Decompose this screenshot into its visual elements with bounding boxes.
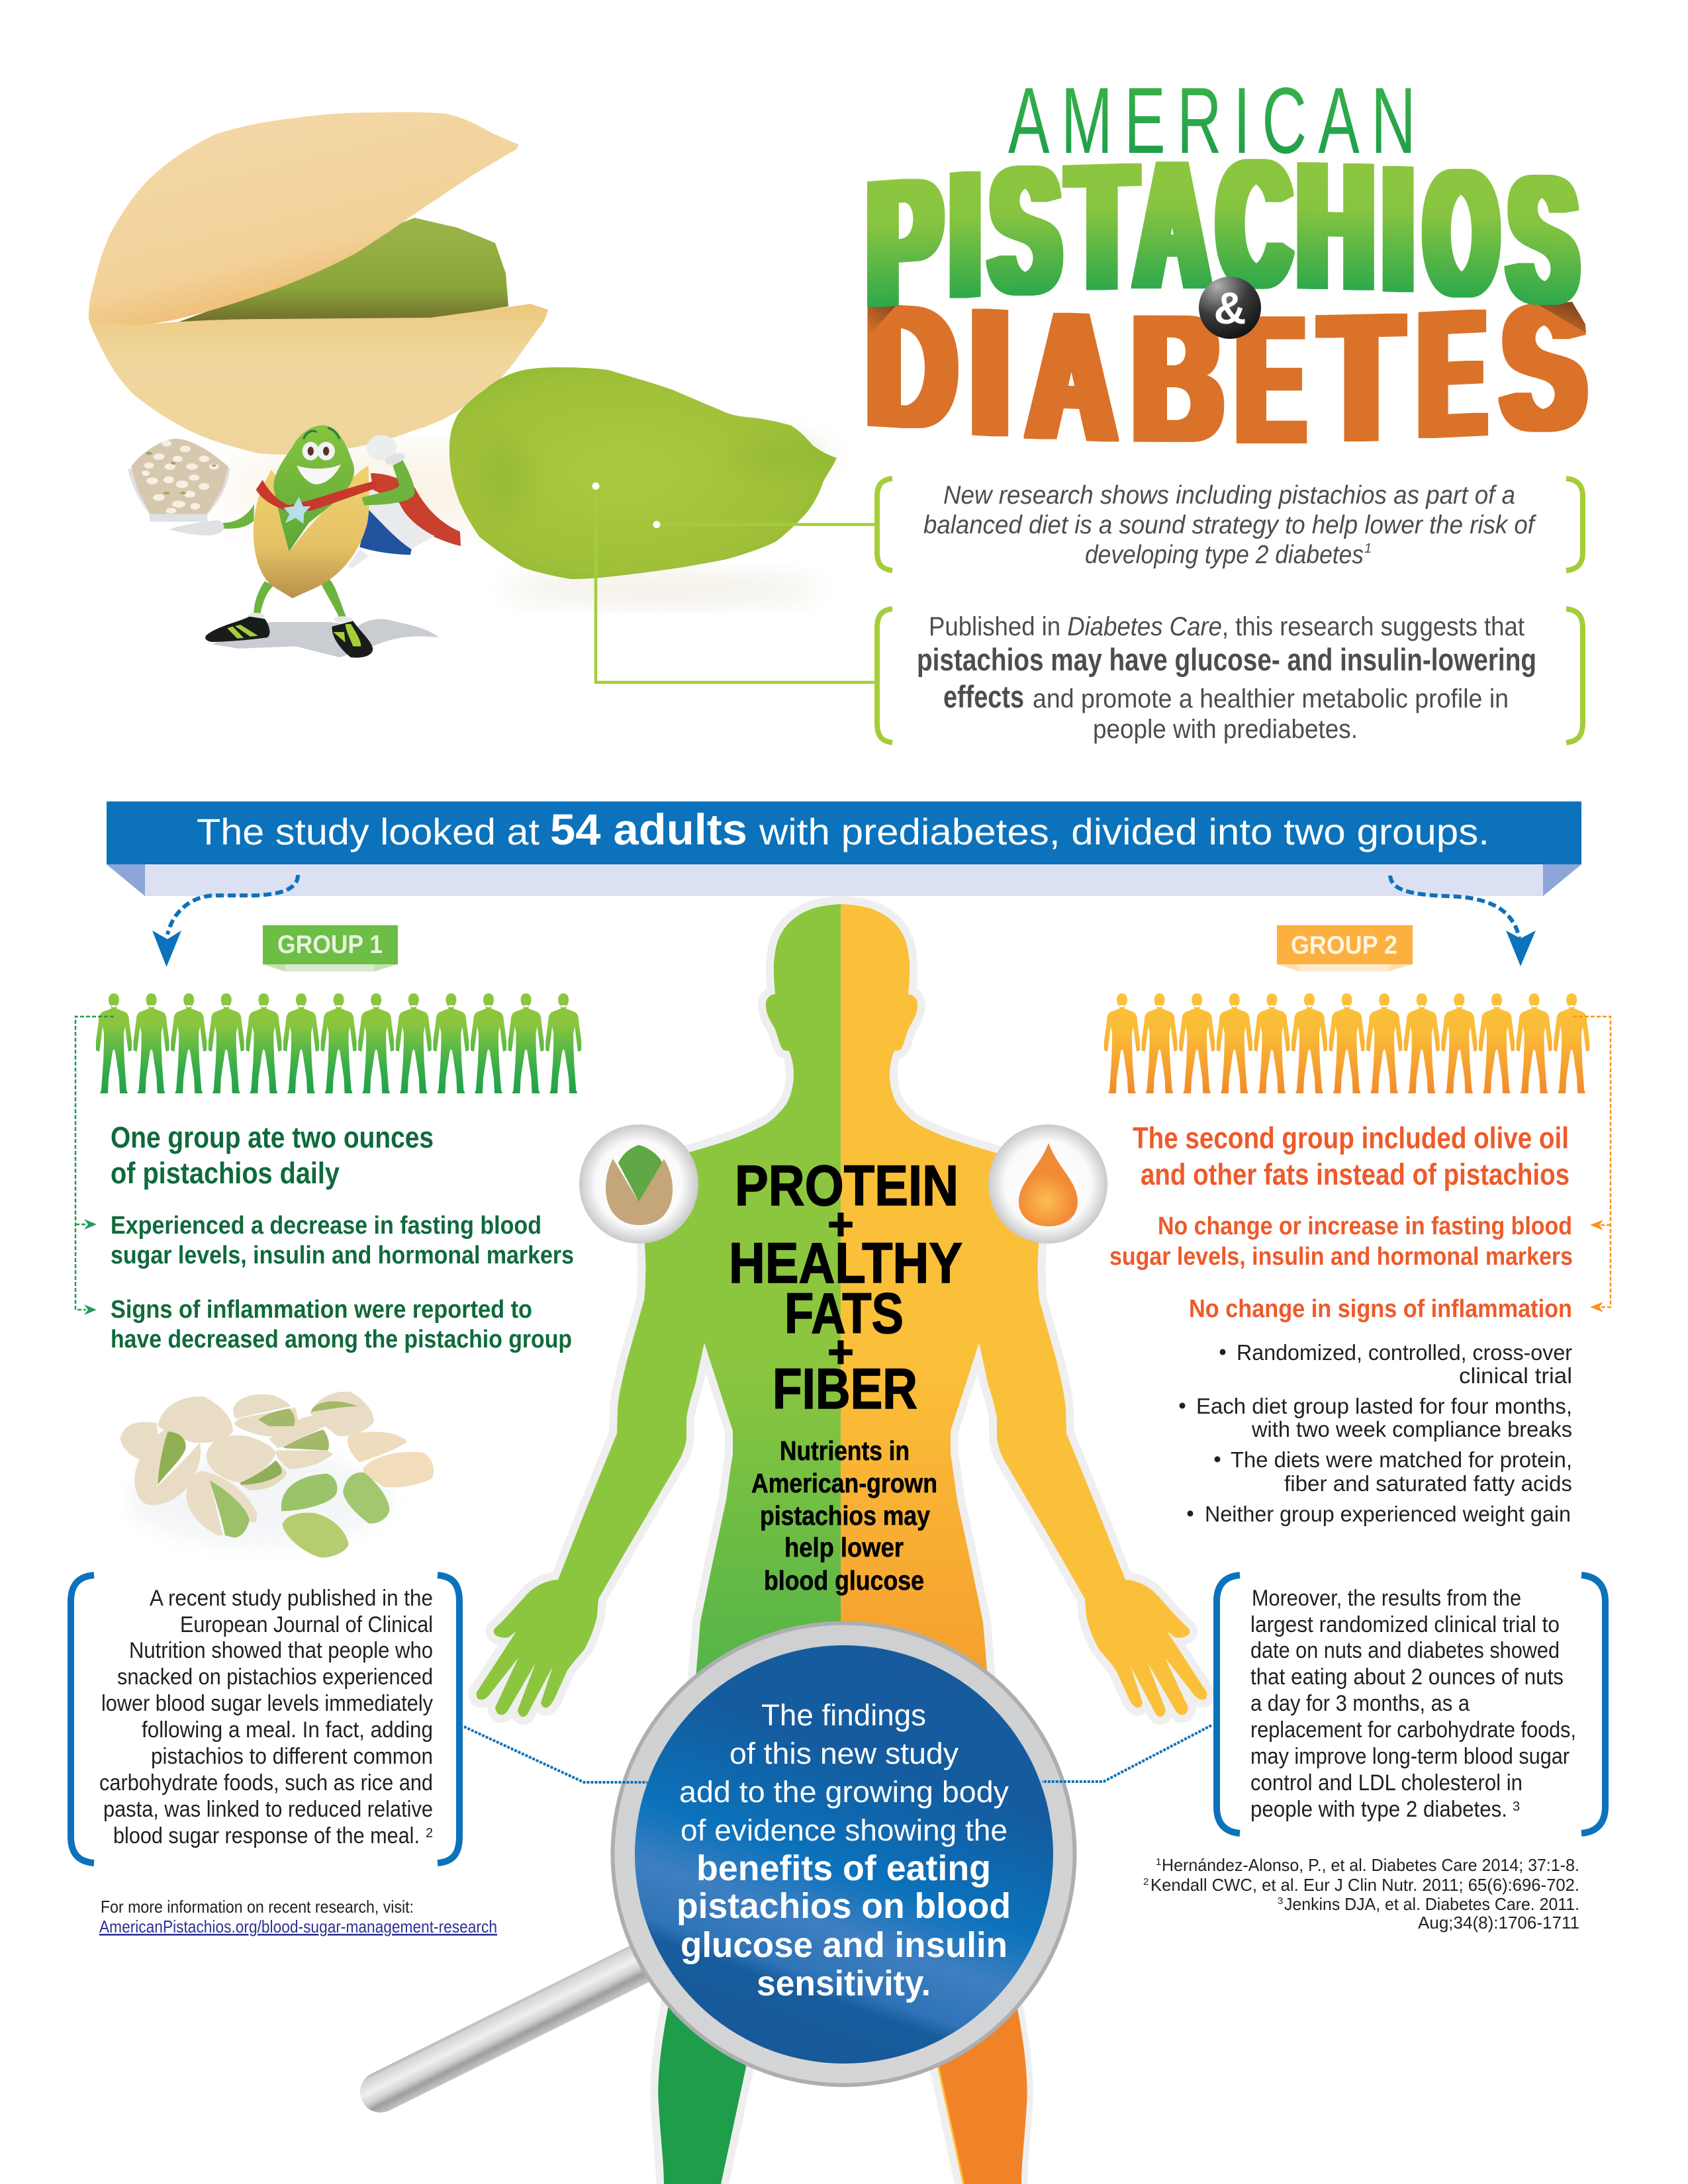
group 2 findings text [1109, 1121, 1573, 1323]
title line: Diabetes (arched orange letters) [867, 267, 1585, 481]
group 2 heading: The second group included olive oil [1133, 1121, 1569, 1155]
study design bullet list: • [1186, 1501, 1194, 1525]
references: 2 [1143, 1876, 1149, 1888]
title line: Diabetes (arched orange letters): E [1238, 280, 1303, 481]
banner text: with prediabetes, divided into two groups. [759, 811, 1489, 852]
study text lines: blood sugar response of the meal. [113, 1823, 420, 1848]
banner fold right [1543, 864, 1581, 896]
nutrient heading on body: PROTEIN [735, 1154, 959, 1218]
study design bullet list: Randomized, controlled, cross-over [1237, 1340, 1572, 1365]
references: Aug;34(8):1706-1711 [1418, 1913, 1579, 1933]
lens text: glucose and insulin [680, 1925, 1008, 1965]
orange half of body [836, 904, 1207, 2184]
large open nut left [134, 1428, 201, 1505]
title line: Pistachios (arched green letters): I [1383, 128, 1413, 329]
title line: Diabetes (arched orange letters): I [970, 270, 1009, 474]
trial text lines: replacement for carbohydrate foods, [1250, 1717, 1576, 1743]
group 1 result: blood sugar: sugar levels, insulin and hormonal markers [111, 1242, 574, 1269]
arrow: to group 2 [1390, 876, 1536, 966]
callout text: 1 [1364, 541, 1372, 556]
banner underside band [145, 864, 1543, 896]
group 1 heading: of pistachios daily [111, 1156, 340, 1190]
group 2 people row [1104, 993, 1589, 1093]
study design bullet list: Each diet group lasted for four months, [1196, 1394, 1572, 1418]
study text lines: Nutrition showed that people who [129, 1638, 433, 1663]
title line: Diabetes (arched orange letters): B [1133, 278, 1222, 480]
text block: nuts and diabetes trial [1217, 1575, 1605, 1833]
flexed arm and fist [362, 435, 414, 505]
group 1 heading: One group ate two ounces [111, 1120, 434, 1154]
dotted connector: right text to lens [1042, 1725, 1211, 1782]
title [867, 69, 1586, 481]
banner text: The study looked at [197, 811, 539, 852]
kernel shading [483, 437, 827, 516]
group 1 heading [111, 1120, 434, 1190]
callout text: effects [943, 679, 1024, 714]
title line: American: AMERICAN [1008, 69, 1416, 173]
red sash [256, 480, 379, 512]
nutrient subtext on body [751, 1435, 937, 1596]
mascot face [297, 428, 341, 484]
mascot shadow [212, 619, 439, 657]
green half of body [477, 904, 847, 2184]
group 2 label: GROUP 2 [1291, 931, 1397, 960]
mascot shell body [254, 465, 369, 598]
mascot: superhero pistachio character with bowl of nuts [128, 426, 461, 658]
left arm and gloved hand [169, 504, 254, 535]
trial text lines: Moreover, the results from the [1252, 1586, 1521, 1611]
title line: Diabetes (arched orange letters): D [867, 268, 956, 467]
title line: Pistachios (arched green letters): S [991, 128, 1059, 332]
group 2 heading [1133, 1121, 1570, 1191]
callout text: and promote a healthier metabolic profile in [1033, 684, 1509, 713]
study text lines: A recent study published in the [150, 1586, 433, 1611]
study text lines: 2 [426, 1826, 433, 1841]
trial text lines: that eating about 2 ounces of nuts [1250, 1664, 1564, 1690]
study text lines: pasta, was linked to reduced relative [103, 1797, 433, 1822]
lens text [677, 1698, 1011, 2003]
callout text: New research shows including pistachios as part of a [943, 481, 1515, 510]
study text lines: pistachios to different common [151, 1744, 433, 1769]
intro callout 2 [877, 609, 1583, 744]
green brackets [877, 609, 1583, 743]
group 1 result: inflammation: have decreased among the pistachio group [111, 1326, 572, 1353]
photo: pile of pistachios [120, 1392, 434, 1558]
study design bullet list: • [1213, 1447, 1221, 1471]
banner text [197, 805, 1489, 854]
title line: Diabetes (arched orange letters): E [1420, 272, 1484, 476]
references: 1 [1156, 1856, 1161, 1868]
group 2 result: blood sugar: sugar levels, insulin and hormonal markers [1109, 1243, 1573, 1271]
nutrient heading on body: FATS [784, 1282, 904, 1345]
human body figure [477, 904, 1207, 2184]
references: Kendall CWC, et al. Eur J Clin Nutr. 2011; 65(6):696-702. [1150, 1875, 1579, 1895]
callout text [917, 612, 1536, 744]
title line: Pistachios (arched green letters) [868, 124, 1577, 344]
more information link: For more information on recent research, visit: [101, 1897, 414, 1917]
trial text lines: a day for 3 months, as a [1250, 1691, 1470, 1716]
callout text: people with prediabetes. [1093, 715, 1358, 744]
callout text: balanced diet is a sound strategy to help lower the risk of [923, 511, 1537, 539]
banner fold left [107, 864, 145, 896]
lens text: benefits of eating [696, 1848, 991, 1888]
group 2 dashed connector arrows [1573, 1017, 1611, 1312]
group 2 heading: and other fats instead of pistachios [1141, 1158, 1570, 1191]
title line: Pistachios (arched green letters): I [951, 134, 980, 336]
nutrient subtext on body: blood glucose [764, 1565, 924, 1596]
nutrient heading on body [729, 1154, 962, 1421]
callout text [923, 481, 1537, 569]
lens text: add to the growing body [679, 1775, 1009, 1809]
title line: Diabetes (arched orange letters): A [1029, 273, 1114, 478]
study text lines: snacked on pistachios experienced [117, 1664, 433, 1690]
more information link: AmericanPistachios.org/blood-sugar-management-research [99, 1917, 497, 1936]
blue brackets [1217, 1575, 1605, 1833]
blue brackets [71, 1575, 459, 1863]
callout text: pistachios may have glucose- and insulin-lowering [917, 642, 1536, 677]
lens text: sensitivity. [757, 1964, 931, 2003]
trial text lines: may improve long-term blood sugar [1250, 1744, 1570, 1769]
references: Hernández-Alonso, P., et al. Diabetes Care 2014; 37:1-8. [1162, 1855, 1579, 1875]
legs [254, 576, 346, 619]
group 1 findings text [111, 1120, 574, 1353]
callout connector lines from kernel [592, 482, 874, 682]
callout text: developing type 2 diabetes [1085, 541, 1364, 569]
nutrient heading on body: FIBER [773, 1357, 917, 1421]
nutrient subtext on body: American-grown [751, 1468, 937, 1498]
references [1143, 1855, 1579, 1933]
title line: Pistachios (arched green letters): C [1219, 124, 1289, 324]
dotted connector: left text to lens [464, 1727, 647, 1782]
cape [348, 473, 461, 568]
study design bullet list: • [1178, 1393, 1186, 1418]
trial text lines: date on nuts and diabetes showed [1250, 1638, 1560, 1663]
callout text: Published in Diabetes Care, this research suggests that [929, 612, 1524, 641]
body halo outline [477, 904, 1207, 2184]
study text lines [99, 1586, 433, 1848]
magnifying glass [381, 1621, 1076, 2092]
group 1 label: GROUP 1 [277, 931, 383, 959]
title line: Pistachios (arched green letters): A [1137, 124, 1208, 326]
text block: European Journal study [71, 1575, 459, 1863]
banner bar [107, 801, 1581, 864]
group 1 result: blood sugar: Experienced a decrease in fasting blood [111, 1212, 541, 1240]
banner text: 54 adults [550, 805, 747, 854]
trial text lines [1250, 1586, 1576, 1822]
lens ring [610, 1621, 1076, 2087]
empty shells [348, 1432, 434, 1488]
study design bullet list: • [1219, 1340, 1227, 1364]
lower pistachio shell [89, 304, 548, 455]
study text lines: European Journal of Clinical [180, 1612, 433, 1637]
more information link [99, 1897, 497, 1936]
references: Jenkins DJA, et al. Diabetes Care. 2011. [1284, 1894, 1579, 1914]
lens text: pistachios on blood [677, 1886, 1011, 1926]
group 2 result: blood sugar: No change or increase in fasting blood [1158, 1212, 1572, 1240]
center nut [207, 1435, 287, 1490]
references: 3 [1278, 1895, 1283, 1907]
glass bowl of nuts [128, 439, 230, 522]
open nut bottom [187, 1471, 257, 1537]
upper pistachio shell [89, 112, 518, 325]
trial text lines: people with type 2 diabetes. [1250, 1797, 1507, 1822]
lens text: The findings [761, 1698, 926, 1732]
icon: pistachio badge [579, 1124, 698, 1244]
nutrient subtext on body: Nutrients in [780, 1435, 910, 1466]
title line: Pistachios (arched green letters): H [1298, 125, 1373, 328]
group 2 label [1277, 925, 1413, 972]
group 1 result: blood sugar [111, 1212, 574, 1269]
study design bullet list: clinical trial [1459, 1363, 1572, 1388]
study design bullet list: fiber and saturated fatty acids [1284, 1471, 1572, 1496]
study text lines: following a meal. In fact, adding [142, 1717, 433, 1743]
ribbon fold corners [868, 302, 1586, 334]
title line: Pistachios (arched green letters): P [868, 140, 941, 344]
study text lines: lower blood sugar levels immediately [101, 1691, 433, 1716]
ampersand badge: & [1213, 283, 1246, 334]
green brackets [877, 478, 1583, 570]
open pistachio kernel [172, 218, 508, 324]
group 1 result: inflammation [111, 1296, 572, 1353]
loose kernels [281, 1473, 389, 1558]
kernels in shells [258, 1401, 357, 1451]
trial text lines: control and LDL cholesterol in [1250, 1770, 1523, 1796]
title line: Pistachios (arched green letters): T [1069, 126, 1135, 328]
soft shadow under nuts [225, 457, 821, 604]
group 1 result: inflammation: Signs of inflammation were reported to [111, 1296, 532, 1324]
study design bullet list: Neither group experienced weight gain [1205, 1502, 1571, 1526]
group 2 result: inflammation: No change in signs of inflammation [1189, 1295, 1572, 1323]
whole green pistachio kernel [449, 367, 837, 579]
ampersand badge [1199, 277, 1261, 339]
study text lines: carbohydrate foods, such as rice and [99, 1770, 433, 1796]
pistachio photo group [89, 112, 837, 604]
intro callout 1 [877, 478, 1583, 570]
study design bullet list [1178, 1340, 1572, 1526]
shoes [205, 613, 373, 658]
lens glass [635, 1645, 1053, 2064]
study design bullet list: The diets were matched for protein, [1231, 1447, 1572, 1472]
lens text: of this new study [729, 1737, 959, 1770]
arrow: to group 1 [152, 875, 298, 967]
pile shadow [128, 1454, 393, 1547]
star emblem [283, 497, 310, 524]
trial text lines: 3 [1513, 1799, 1520, 1814]
handle [381, 1964, 639, 2092]
group 1 label [263, 925, 398, 972]
title line: Diabetes (arched orange letters): T [1322, 276, 1401, 480]
study banner [107, 801, 1581, 896]
nutrient heading on body: + [827, 1199, 854, 1250]
nutrient heading on body: + [827, 1327, 854, 1377]
shells [120, 1392, 374, 1469]
group 2 result: blood sugar [1109, 1212, 1573, 1271]
mascot green head [273, 426, 354, 551]
nutrient subtext on body: pistachios may [760, 1500, 930, 1531]
title line: Pistachios (arched green letters): O [1426, 133, 1497, 334]
icon: oil drop badge [988, 1124, 1107, 1244]
study design bullet list: with two week compliance breaks [1251, 1417, 1572, 1441]
trial text lines: largest randomized clinical trial to [1250, 1612, 1560, 1637]
nutrient subtext on body: help lower [784, 1532, 904, 1563]
lens text: of evidence showing the [680, 1813, 1008, 1847]
nutrient heading on body: HEALTHY [729, 1232, 962, 1295]
group 1 people row [96, 993, 581, 1093]
title line: Diabetes (arched orange letters): S [1503, 267, 1585, 469]
group 1 dashed connector arrows [75, 1017, 114, 1315]
title line: Pistachios (arched green letters): S [1509, 136, 1577, 343]
